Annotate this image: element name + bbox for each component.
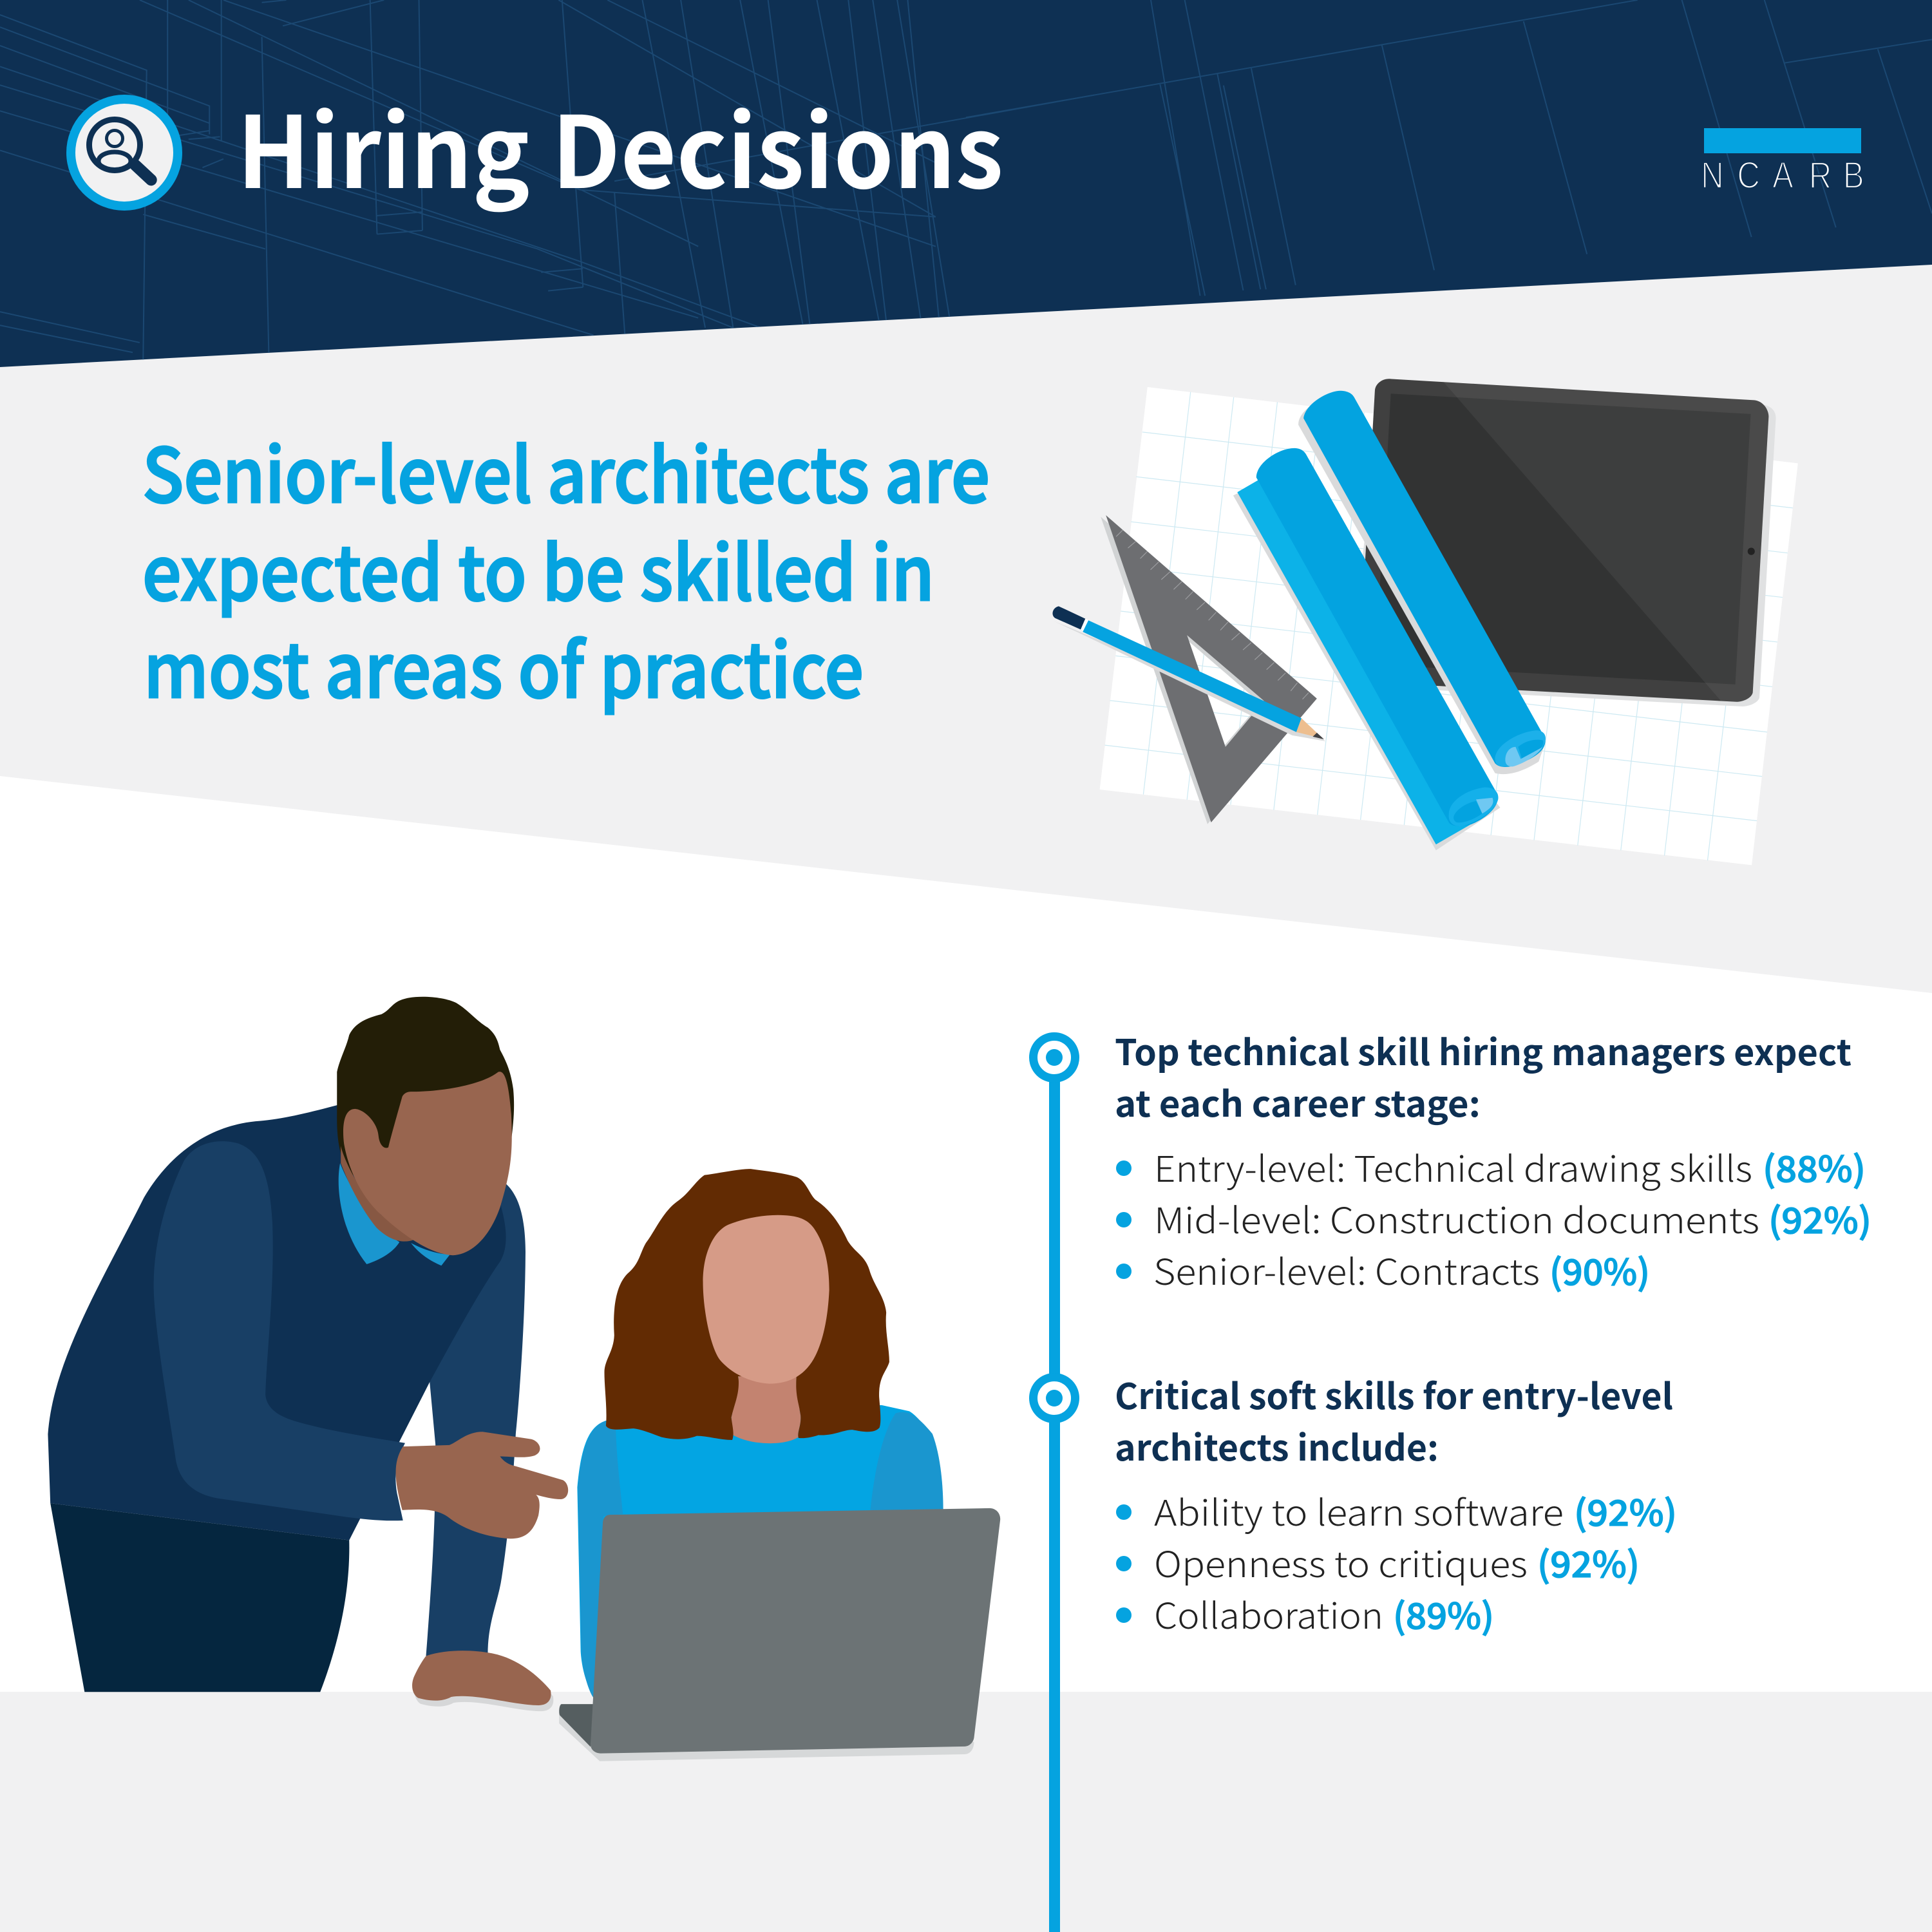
- far arm: [426, 1180, 526, 1656]
- collar: [339, 1163, 450, 1265]
- bullet: software: [1116, 1484, 1677, 1536]
- bullet: software: (92%): [1574, 1484, 1677, 1536]
- heading: soft skills: [1115, 1368, 1673, 1471]
- icon: magnifier with person: [71, 99, 178, 206]
- hair: [337, 997, 514, 1175]
- text block: soft skills: [1115, 1368, 1677, 1639]
- illustration: man pointing: [48, 997, 568, 1711]
- blueprint roll: back: [1298, 391, 1546, 774]
- timeline marker 1: [1033, 1037, 1075, 1078]
- timeline: [1033, 1037, 1075, 1932]
- neck shadow: [341, 1146, 415, 1242]
- text block: technical skills: [1115, 1024, 1871, 1295]
- bullet: mid-level: Mid-level: Construction documents: [1154, 1192, 1759, 1244]
- pencil: [1052, 606, 1325, 741]
- headline: senior-level architects: expected to be skilled in: [142, 514, 934, 622]
- bullet: critiques: [1116, 1536, 1640, 1587]
- graph paper: [1100, 387, 1798, 865]
- title: Hiring Decisions: [237, 73, 1003, 217]
- bullet: mid-level: (92%): [1768, 1192, 1871, 1244]
- bullet: collaboration: (89%): [1393, 1587, 1494, 1639]
- illustration: drafting tools: [1052, 379, 1798, 865]
- bullet: senior-level: (90%): [1549, 1244, 1650, 1295]
- heading: technical skill: Top technical skill hiring managers expect: [1115, 1024, 1852, 1075]
- near arm: [154, 1141, 405, 1520]
- hair: [604, 1169, 889, 1440]
- sweater vest: [48, 1105, 506, 1540]
- illustration: woman at laptop: [559, 1169, 1000, 1761]
- panel: intro grey band: [0, 265, 1932, 993]
- panel: navy header: [0, 0, 1932, 367]
- trousers: [50, 1503, 349, 1692]
- set square: [1101, 515, 1317, 824]
- heading: soft skills: Critical soft skills for entry-level: [1115, 1368, 1673, 1419]
- right sleeve: [870, 1412, 943, 1511]
- left sleeve: [578, 1421, 623, 1699]
- bullet: critiques: Openness to critiques: [1154, 1536, 1528, 1587]
- face: [703, 1215, 829, 1384]
- heading: technical skill: [1115, 1024, 1852, 1127]
- bullet: collaboration: Collaboration: [1154, 1587, 1383, 1639]
- panel: desk surface: [0, 1692, 1932, 1932]
- headline: senior-level architects: Senior-level architects are: [142, 416, 990, 524]
- bullet: senior-level: Senior-level: Contracts: [1153, 1244, 1540, 1295]
- resting hand: [412, 1651, 553, 1711]
- logo: NCARB: NCARB: [1701, 155, 1864, 196]
- logo: NCARB: [1701, 128, 1864, 196]
- bullet: collaboration: [1116, 1587, 1494, 1639]
- bullet: entry-level: Entry-level: Technical drawing skills: [1154, 1141, 1752, 1192]
- bullet: critiques: (92%): [1537, 1536, 1640, 1587]
- laptop: [559, 1508, 1000, 1761]
- sweater: [577, 1405, 943, 1699]
- pointing hand: [396, 1432, 568, 1539]
- tablet: [1359, 379, 1776, 706]
- bullet: entry-level: (88%): [1763, 1141, 1866, 1192]
- timeline marker 2: [1033, 1377, 1075, 1419]
- headline: senior-level architects: most areas of practice: [144, 611, 864, 719]
- bullet: senior-level: [1116, 1244, 1650, 1295]
- blueprint roll: front: [1233, 448, 1500, 850]
- heading: soft skills: architects include:: [1115, 1419, 1439, 1471]
- neck: [732, 1368, 800, 1443]
- headline: senior-level architects: [142, 416, 990, 719]
- bullet: software: Ability to learn software: [1154, 1484, 1564, 1536]
- face: [343, 1072, 512, 1255]
- heading: technical skill: at each career stage:: [1115, 1075, 1481, 1127]
